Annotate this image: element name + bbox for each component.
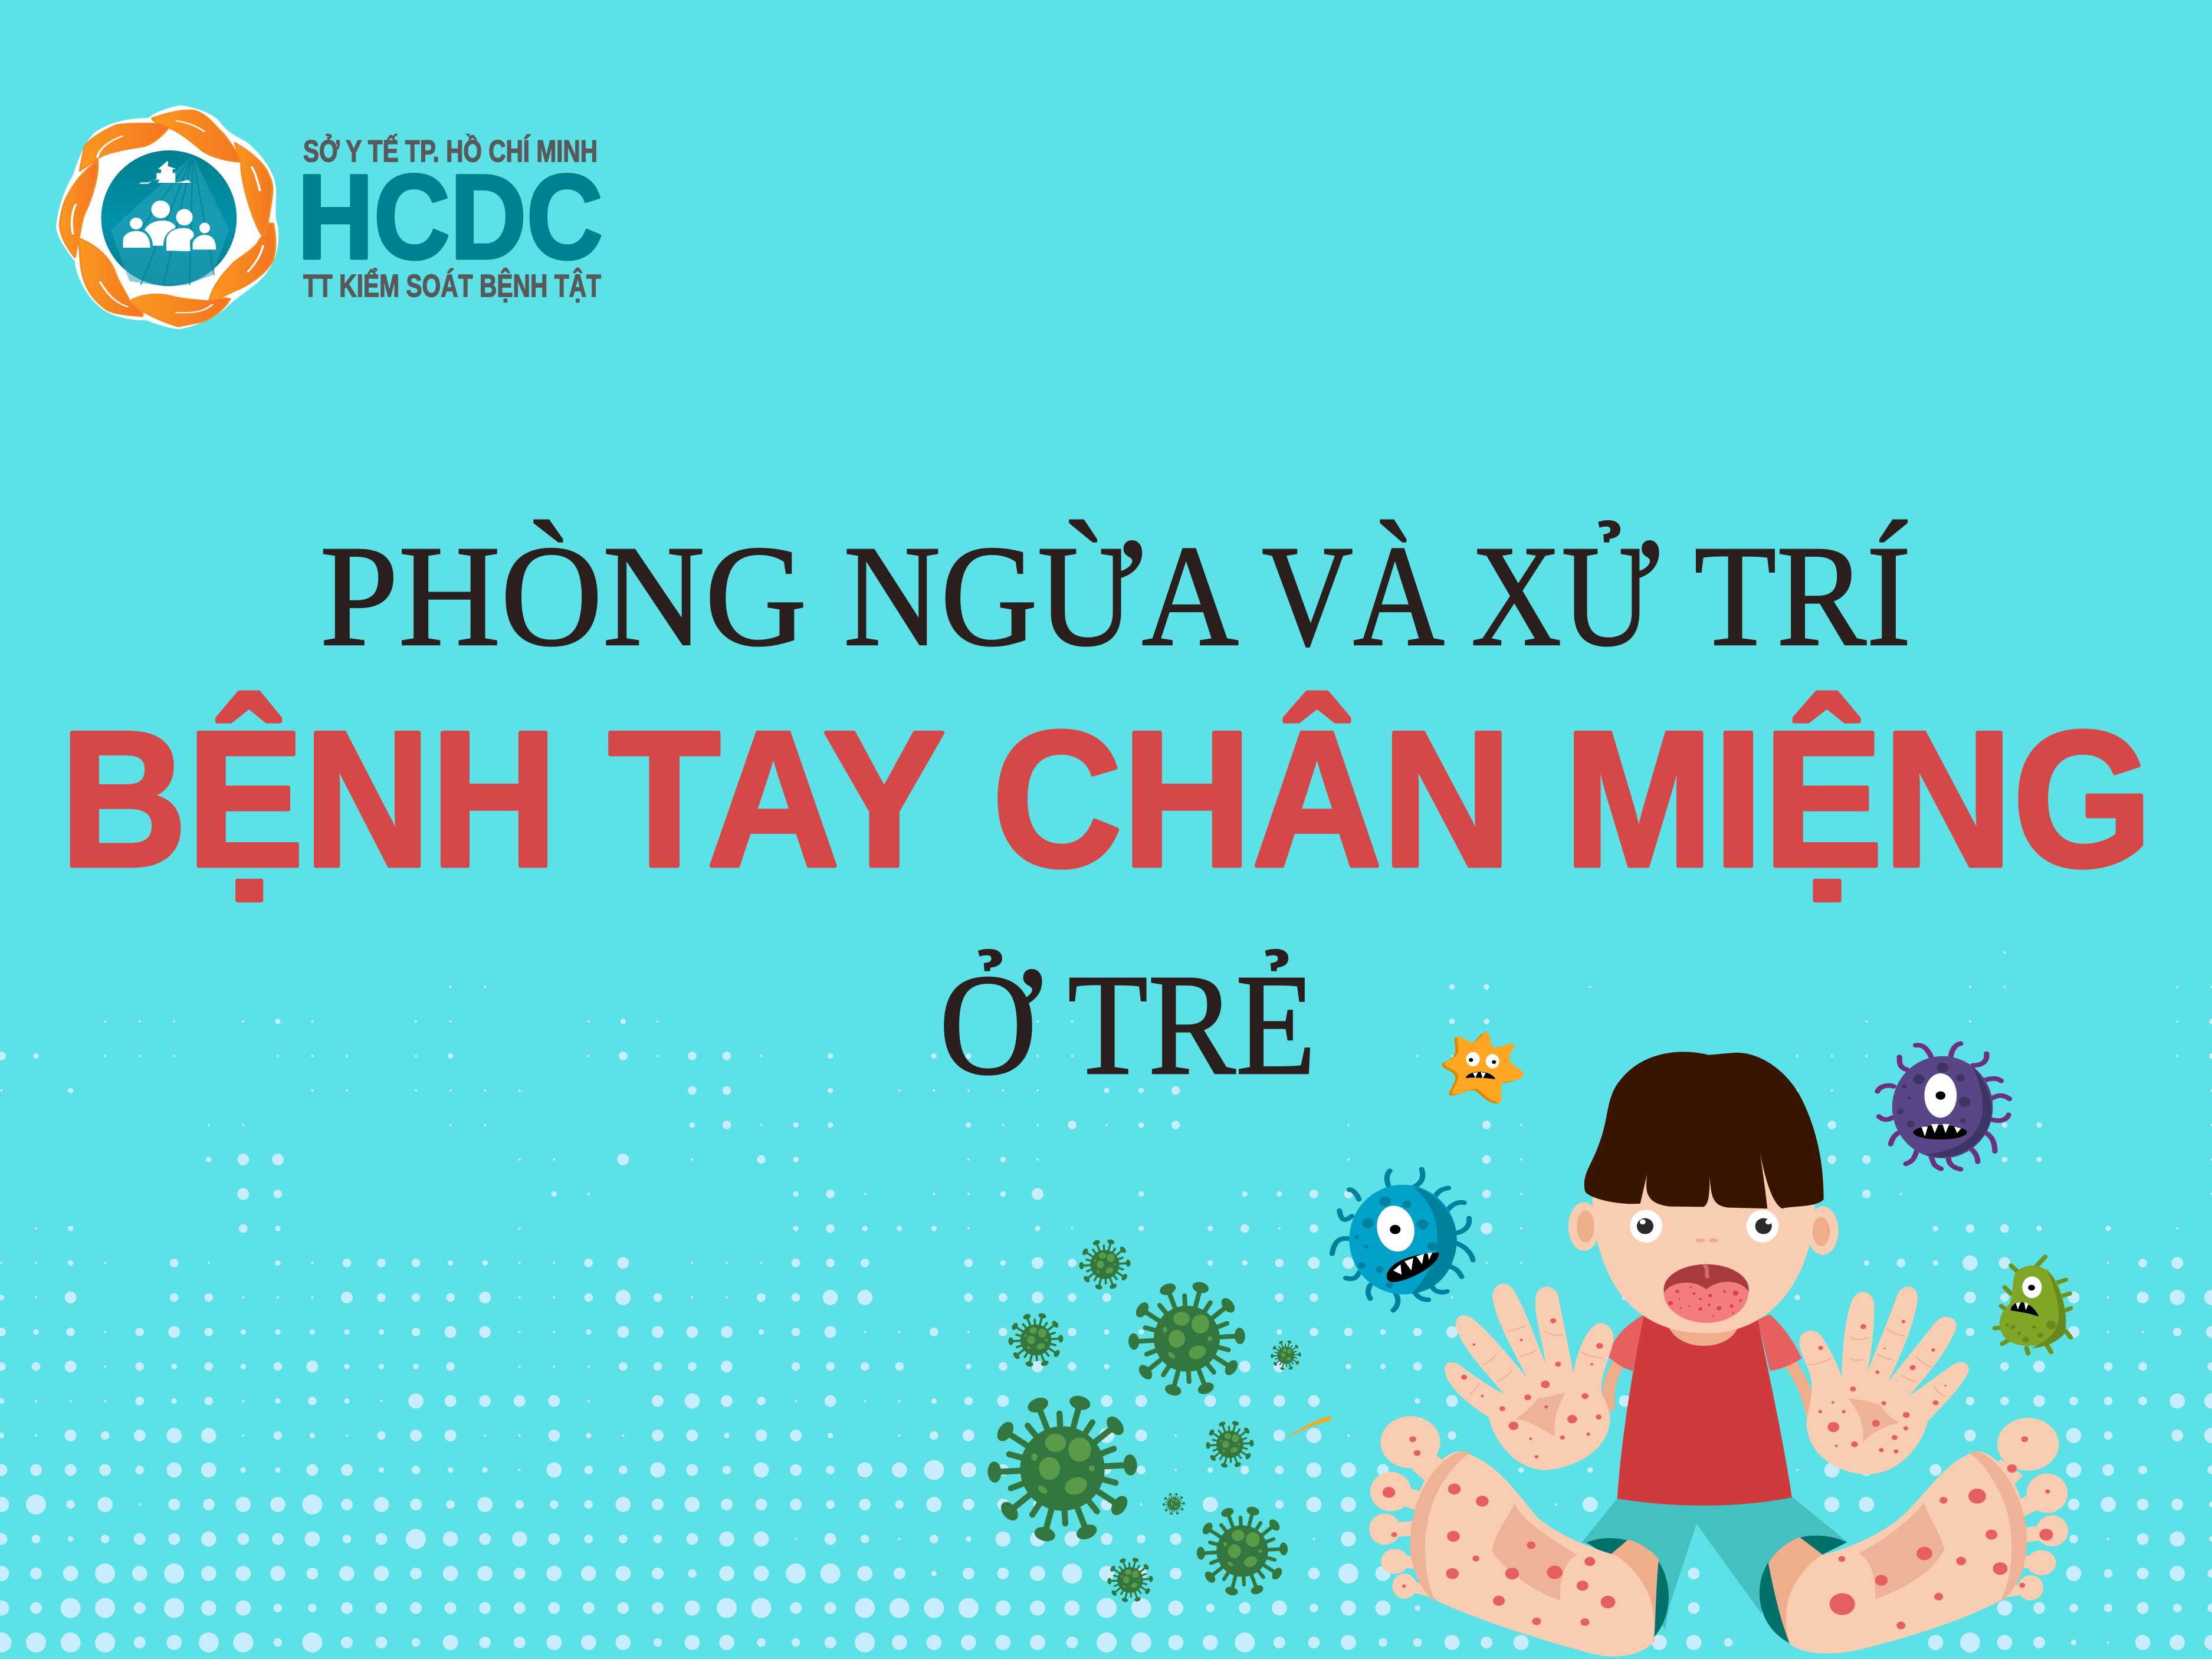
child: arms bbox=[1608, 1362, 1813, 1417]
child: left foot bbox=[1369, 1416, 1655, 1657]
child: shirt sleeves bbox=[1607, 1315, 1801, 1371]
title line 3: Ở bbox=[939, 945, 1042, 1105]
child: neck bbox=[1669, 1327, 1738, 1346]
child: left hand with rash bbox=[1445, 1283, 1614, 1470]
virus small middle bbox=[1206, 1420, 1254, 1469]
child: right hand with rash bbox=[1799, 1287, 1969, 1474]
title line 3 bbox=[939, 945, 1316, 1105]
virus large bbox=[987, 1394, 1137, 1543]
logo: HCDC emblem bbox=[56, 105, 278, 329]
title line 1: TRÍ bbox=[1694, 516, 1911, 676]
title line 2: disease name: MIỆNG bbox=[1564, 691, 2152, 907]
germ: purple one-eyed bbox=[1878, 1044, 2010, 1169]
virus upper right large bbox=[1128, 1280, 1246, 1397]
title line 1 bbox=[320, 516, 1911, 676]
child: right shorts cuff and thigh bbox=[1760, 1536, 1847, 1643]
child: left shorts cuff and thigh bbox=[1586, 1538, 1669, 1643]
child: shorts bbox=[1581, 1497, 1848, 1631]
child: ears bbox=[1568, 1203, 1839, 1255]
title line 2: disease name: TAY bbox=[608, 691, 946, 907]
title line 1: PHÒNG bbox=[320, 516, 807, 676]
logo text: center name: TT KIỂM SOÁT BỆNH TẬT bbox=[303, 268, 601, 304]
virus tiny middle bbox=[1163, 1493, 1185, 1515]
virus small left bbox=[1008, 1312, 1064, 1368]
child: face bbox=[1592, 1128, 1815, 1333]
title line 1: NGỪA bbox=[844, 516, 1239, 676]
halftone dot background bbox=[1, 952, 2212, 1642]
child: eyes bbox=[1630, 1210, 1778, 1243]
title line 1: VÀ bbox=[1262, 516, 1445, 676]
title line 2: disease name bbox=[60, 691, 2152, 907]
virus tiny right bbox=[1271, 1340, 1301, 1371]
virus small bottom bbox=[1107, 1557, 1153, 1603]
illustration: child and germs bbox=[1332, 1032, 2070, 1657]
germ: orange star bbox=[1442, 1032, 1524, 1103]
child: shirt bbox=[1617, 1315, 1792, 1506]
virus medium bottom bbox=[1196, 1506, 1288, 1596]
child: right foot bbox=[1786, 1418, 2068, 1654]
child: nose bbox=[1695, 1238, 1718, 1243]
germ: green one-eyed bbox=[1995, 1257, 2070, 1354]
orange streak bbox=[1284, 1415, 1331, 1440]
child: mouth and spotted tongue bbox=[1663, 1264, 1749, 1323]
child: hair bbox=[1584, 1052, 1824, 1208]
title line 2: disease name: BỆNH bbox=[60, 691, 557, 907]
logo text: department name: SỞ Y TẾ TP. HỒ CHÍ MINH bbox=[303, 134, 598, 169]
germ: blue one-eyed bbox=[1332, 1169, 1473, 1310]
logo text: HCDC: HCDC bbox=[297, 150, 603, 284]
title line 3: TRẺ bbox=[1068, 945, 1316, 1105]
virus small top bbox=[1079, 1238, 1131, 1290]
title line 1: XỬ bbox=[1471, 516, 1659, 676]
title line 2: disease name: CHÂN bbox=[992, 691, 1512, 907]
